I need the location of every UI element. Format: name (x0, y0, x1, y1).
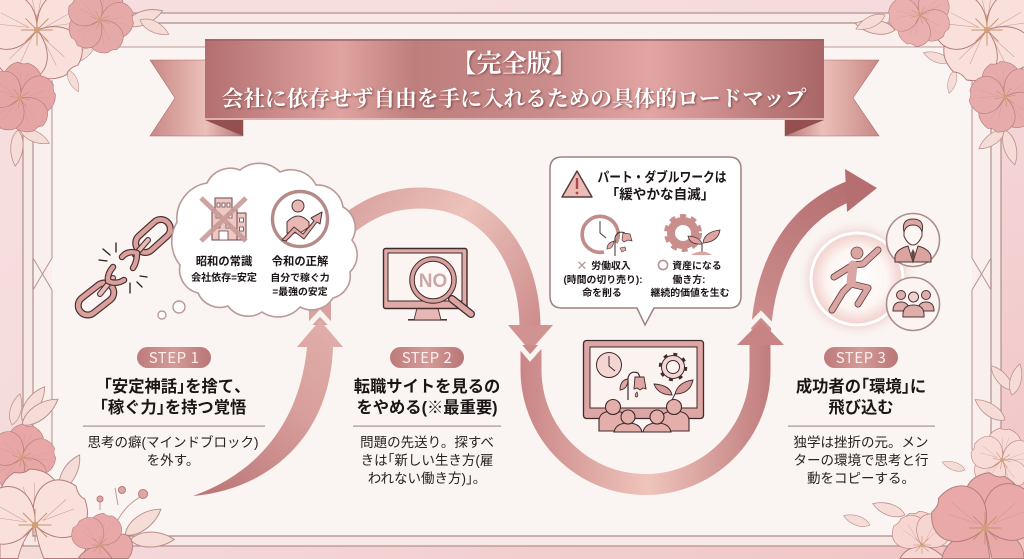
flowers: bottom right (842, 362, 1024, 558)
step 2 badge: STEP 2 (402, 347, 452, 368)
step 1 heading: 「稼ぐ力」を持つ覚悟 (100, 398, 246, 417)
step 3 body: ターの環境で思考と行 (794, 453, 928, 468)
step 1 heading: 「安定神話」を捨て、 (104, 377, 242, 396)
callout heading (598, 169, 727, 202)
step 2 body: われない働き方)」。 (368, 471, 486, 486)
step 3 body: 動をコピーする。 (807, 471, 915, 486)
flowers: top left (0, 0, 171, 167)
icon: person with rising chart (272, 192, 328, 246)
arrow: up into step 3 (737, 169, 877, 345)
callout heading: パート・ダブルワークは (598, 169, 727, 185)
step 1 body: を外す。 (147, 453, 199, 468)
step 1 block (83, 347, 265, 468)
text: asset work: 働き方: (673, 273, 705, 286)
thought bubble: mindset comparison (158, 163, 357, 319)
step 3 block (788, 347, 935, 486)
arrow: U curve (508, 332, 760, 484)
icon: screen with clock, gear, audience (584, 340, 704, 432)
text: earning power: =最強の安定 (272, 285, 328, 298)
icon: warning triangle (562, 171, 592, 197)
title: first line: 【完全版】 (451, 50, 577, 78)
step 1 badge (137, 347, 211, 368)
icon: clock with wilted flower (582, 216, 632, 256)
icon: monitor with NO magnifier (384, 248, 471, 321)
step 3 heading: 飛び込む (828, 399, 894, 417)
step 3 body (794, 435, 928, 486)
title: second line: 会社に依存せず自由を手に入れるための具体的ロードマップ (222, 87, 807, 111)
icon: group (886, 278, 940, 330)
step 1 body: 思考の癖(マインドブロック) (88, 434, 258, 450)
icon: runner with mentor and group (797, 214, 940, 339)
icon: mentor (886, 214, 940, 266)
text: labor income (563, 258, 643, 299)
title ribbon (150, 39, 879, 136)
icon: broken chain (74, 216, 174, 319)
step 2 badge (390, 347, 464, 368)
step 2 body (360, 435, 494, 486)
step 2 body: 問題の先送り。探すべ (360, 435, 494, 450)
icon: gear with sprout (666, 216, 720, 255)
text: earning power: 自分で稼ぐ力 (270, 271, 330, 284)
step 1 body (88, 434, 258, 468)
text: labor income: 労働収入 (591, 259, 631, 272)
text: labor income: ✕ (577, 258, 587, 273)
text: asset work: 資産になる (672, 259, 722, 272)
flowers: bottom left (0, 384, 175, 558)
callout heading: 「緩やかな自滅」 (612, 186, 708, 202)
step 3 heading (796, 377, 926, 417)
text: asset work (650, 259, 730, 299)
text: showa common sense: 昭和の常識 (196, 254, 253, 268)
step 2 heading (354, 378, 500, 417)
step 2 body: きは「新しい生き方(雇 (361, 453, 493, 468)
arrow: arc to step 2 (320, 198, 553, 351)
icon: monitor with NO magnifier: NO (419, 271, 447, 292)
step 1 heading (100, 377, 246, 417)
step 3 badge: STEP 3 (836, 347, 886, 368)
flowers: top right (854, 0, 1024, 166)
step 3 heading: 成功者の「環境」に (796, 377, 926, 396)
text: labor income: 命を削る (582, 286, 622, 299)
step 3 body: 独学は挫折の元。メン (794, 435, 928, 450)
step 2 heading: をやめる(※最重要) (356, 399, 498, 417)
step 2 heading: 転職サイトを見るの (354, 378, 500, 396)
arrow: step 1 rising (193, 313, 344, 496)
callout: double work warning (550, 157, 741, 325)
text: earning power (270, 271, 330, 298)
text: labor income: (時間の切り売り): (563, 273, 643, 286)
text: reiwa answer: 令和の正解 (272, 254, 328, 268)
step 3 badge (824, 347, 898, 368)
step 2 block (353, 347, 501, 486)
step 1 badge: STEP 1 (149, 347, 199, 368)
icon: crossed-out building (201, 198, 246, 241)
text: dependence equals stability: 会社依存=安定 (191, 271, 257, 284)
text: asset work: 継続的価値を生む (650, 286, 730, 299)
